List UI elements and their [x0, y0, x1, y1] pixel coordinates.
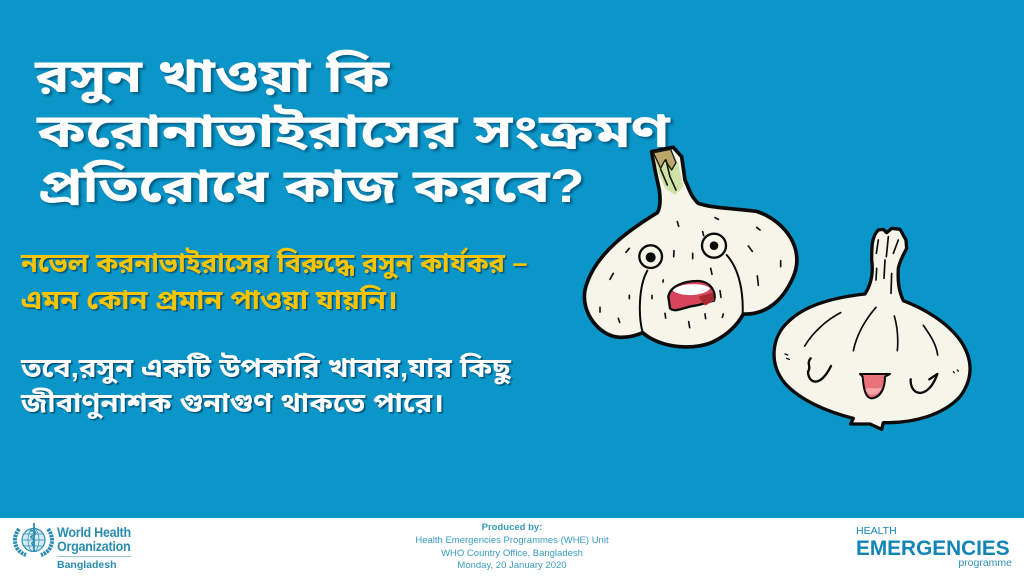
- logo: Health Emergencies programme: programme: [958, 557, 1012, 569]
- logo: WHO emblem: [13, 523, 54, 557]
- yellow statement: [20, 247, 529, 315]
- yellow statement: নভেল করনাভাইরাসের বিরুদ্ধে রসুন কার্যকর –: [21, 248, 527, 278]
- title: রসুন খাওয়া কি: [35, 49, 389, 102]
- logo: Health Emergencies programme: [856, 525, 1012, 569]
- white statement: তবে,রসুন একটি উপকারি খাবার,যার কিছু: [21, 353, 511, 383]
- credits: Produced by:: [482, 522, 542, 533]
- white statement: জীবাণুনাশক গুনাগুণ থাকতে পারে।: [21, 388, 444, 418]
- logo text: World Health Organization: World Health: [57, 525, 131, 540]
- logo: Health Emergencies programme: EMERGENCIES: [856, 537, 1010, 560]
- icon: worried garlic: [584, 147, 797, 347]
- footer band: [0, 518, 1024, 576]
- illustration: two garlic characters: [582, 146, 972, 431]
- title: [34, 49, 674, 212]
- white statement: [20, 352, 514, 421]
- logo text: World Health Organization: Bangladesh: [57, 559, 117, 571]
- credits: [415, 522, 609, 571]
- credits: Monday, 20 January 2020: [457, 560, 567, 571]
- title: প্রতিরোধে কাজ করবে?: [38, 159, 584, 212]
- title: করোনাভাইরাসের সংক্রমণ: [37, 104, 670, 157]
- credits: Health Emergencies Programmes (WHE) Unit: [415, 535, 609, 546]
- credits: WHO Country Office, Bangladesh: [441, 548, 583, 559]
- icon: smiling garlic: [774, 228, 970, 429]
- logo: Health Emergencies programme: HEALTH: [856, 525, 897, 537]
- logo text: World Health Organization: [57, 525, 131, 571]
- yellow statement: এমন কোন প্রমান পাওয়া যায়নি।: [21, 285, 398, 315]
- logo text: World Health Organization: Organization: [57, 539, 130, 554]
